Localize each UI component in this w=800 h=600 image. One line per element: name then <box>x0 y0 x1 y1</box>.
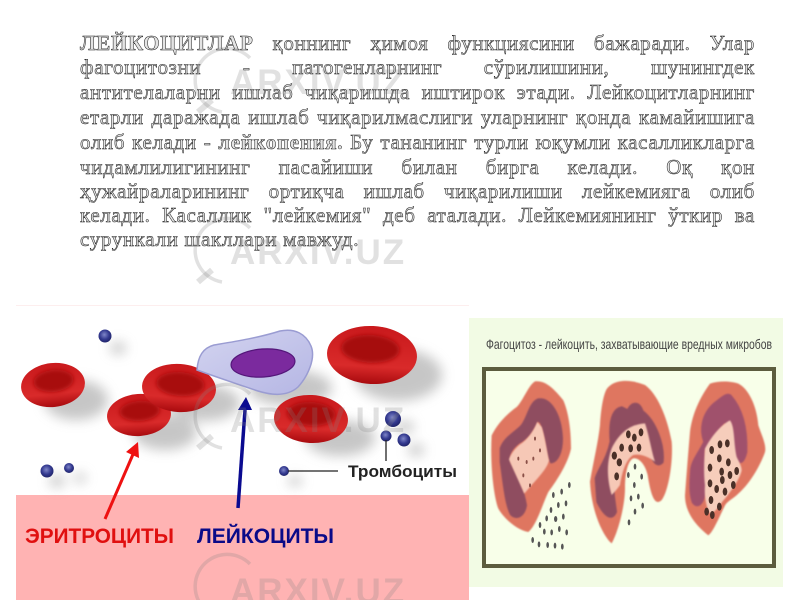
panel: phagocytosis <box>195 48 783 600</box>
body text block: ҳужайраларининг ортиқча ишлаб чиқарилиши лейкемияга олиб <box>80 179 755 203</box>
microbes outside cells <box>531 464 644 550</box>
watermark repeats: ARXIV.UZ <box>230 63 406 102</box>
red blood cell 2 <box>106 392 172 438</box>
label: erythrocytes: ЭРИТРОЦИТЫ <box>25 525 174 548</box>
body text block <box>80 31 755 251</box>
arrow: red to erythrocytes <box>105 442 139 519</box>
label: platelets: Тромбоциты <box>348 462 457 481</box>
body text block: етарли даражада ишлаб чиқарилмаслиги уларнинг қонда камайишига <box>80 105 755 129</box>
cell 3 <box>685 382 765 535</box>
microbes inside cells <box>612 428 739 519</box>
arrow: blue to leukocyte <box>238 397 252 508</box>
cell 1 <box>491 381 571 532</box>
watermark repeats <box>195 48 406 600</box>
body text block: келади. Касаллик "лейкемия" деб аталади. Лейкемиянинг ўткир ва <box>80 203 755 227</box>
body text block: олиб келади - лейкопения. Бу тананинг турли юқумли касалликларга <box>80 130 755 154</box>
cell shadows <box>44 342 442 487</box>
watermark repeats: ARXIV.UZ <box>230 233 406 272</box>
body text block: фагоцитозни - патогенларнинг сўрилишини, шунингдек <box>80 55 755 79</box>
body text block: сурункали шакллари мавжуд. <box>80 227 359 251</box>
label: leukocytes: ЛЕЙКОЦИТЫ <box>197 524 334 548</box>
body text block: чидамлилигининг пасайиши билан бирга келади. Оқ қон <box>80 155 755 179</box>
red blood cell 5 <box>273 393 349 445</box>
red blood cell 3 <box>140 361 218 415</box>
white blood cell <box>197 330 313 394</box>
red blood cell 4 <box>326 324 418 386</box>
body text block: ЛЕЙКОЦИТЛАР қоннинг ҳимоя функциясини бажаради. Улар <box>80 31 755 55</box>
watermark repeats: ARXIV.UZ <box>230 401 406 440</box>
panel: blood cells background <box>16 305 469 600</box>
cell 2 <box>590 381 672 543</box>
platelet leader lines <box>288 440 386 471</box>
red blood cell 1 <box>19 360 87 410</box>
body text block: антителаларни ишлаб чиқаришда иштирок этади. Лейкоцитларнинг <box>80 80 755 104</box>
picture frame <box>484 369 774 566</box>
platelets <box>40 330 410 478</box>
